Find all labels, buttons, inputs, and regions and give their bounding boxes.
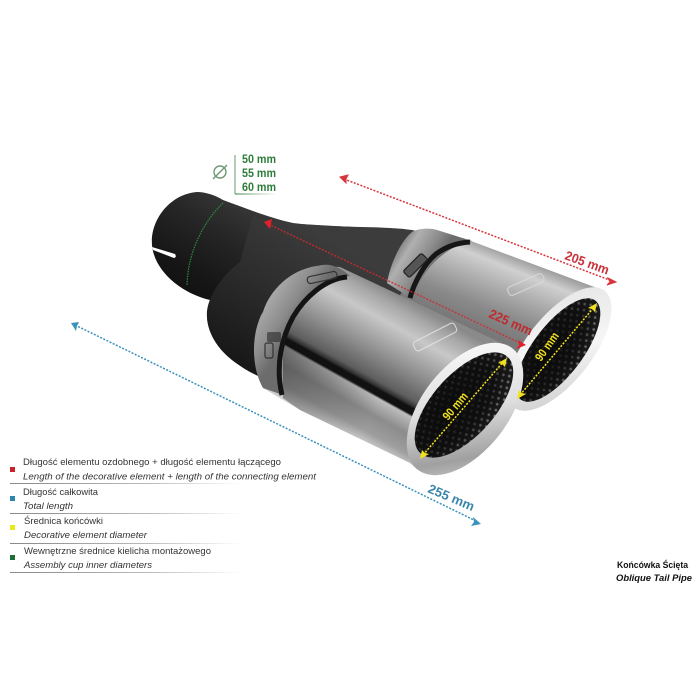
red arrow: total decorative plus connecting length 225 mm — [264, 219, 535, 349]
left tube rim — [384, 322, 546, 496]
yellow arrow left tube — [420, 358, 507, 459]
legend — [10, 457, 316, 573]
left tube lower shading — [283, 345, 418, 470]
legend item: green: Assembly cup inner diameters — [23, 560, 152, 571]
diameter values: 50 mm — [242, 154, 276, 166]
diameter values — [242, 154, 276, 194]
yellow arrows: decorative element diameter — [420, 303, 597, 459]
red arrow: total decorative plus connecting length 225 mm: 225 mm — [487, 306, 535, 338]
legend item: blue: Długość całkowita — [23, 487, 99, 498]
left tube black band — [279, 277, 347, 395]
diameter bracket — [234, 155, 236, 194]
legend item: green — [10, 546, 242, 573]
red arrow: decorative element length 205 mm — [340, 175, 616, 285]
product type caption: Końcówka Ścięta — [617, 559, 689, 571]
legend item: red: Length of the decorative element + length of the connecting element — [23, 472, 316, 482]
legend item: yellow: Decorative element diameter — [24, 530, 148, 541]
blue arrow: total length 255 mm: 255 mm — [426, 481, 477, 514]
diameter values: 55 mm — [242, 168, 276, 180]
diameter values: 60 mm — [242, 182, 276, 194]
left collar dark spot — [267, 332, 281, 342]
green cup diameter marker — [187, 154, 277, 285]
blue arrow: total length 255 mm — [71, 322, 481, 526]
right tube collar — [387, 229, 472, 299]
left tube logo marks — [265, 271, 458, 358]
right chrome tube — [387, 229, 631, 428]
legend item: green: Wewnętrzne średnice kielicha montażowego — [24, 546, 211, 557]
right tube black band — [410, 242, 470, 298]
legend item: yellow — [10, 515, 242, 544]
yellow arrow left tube: 90 mm — [440, 389, 471, 423]
inlet pipe slit — [152, 247, 176, 258]
red arrow: decorative element length 205 mm: 205 mm — [563, 248, 611, 278]
yellow arrow right tube — [517, 303, 597, 399]
legend item: blue: Total length — [23, 501, 73, 512]
right tube perforated insert — [501, 285, 615, 415]
diameter symbol — [213, 165, 227, 179]
legend item: yellow: Średnica końcówki — [24, 515, 103, 527]
right tube logo marks — [403, 253, 545, 296]
inlet black pipe and Y-joint — [152, 192, 420, 376]
legend item: blue — [10, 487, 242, 514]
product type caption: Oblique Tail Pipe — [616, 573, 693, 584]
left chrome tube — [254, 265, 546, 496]
left collar — [254, 265, 350, 395]
right tube rim — [487, 270, 631, 428]
exhaust tail pipe product illustration — [152, 192, 631, 496]
legend item: red — [10, 457, 316, 484]
legend item: red: Długość elementu ozdobnego + długość elementu łączącego — [23, 457, 281, 468]
left tube perforated insert — [397, 336, 531, 474]
yellow arrow right tube: 90 mm — [532, 329, 562, 364]
green dotted ring on inlet — [187, 203, 223, 285]
product type caption — [616, 559, 693, 584]
